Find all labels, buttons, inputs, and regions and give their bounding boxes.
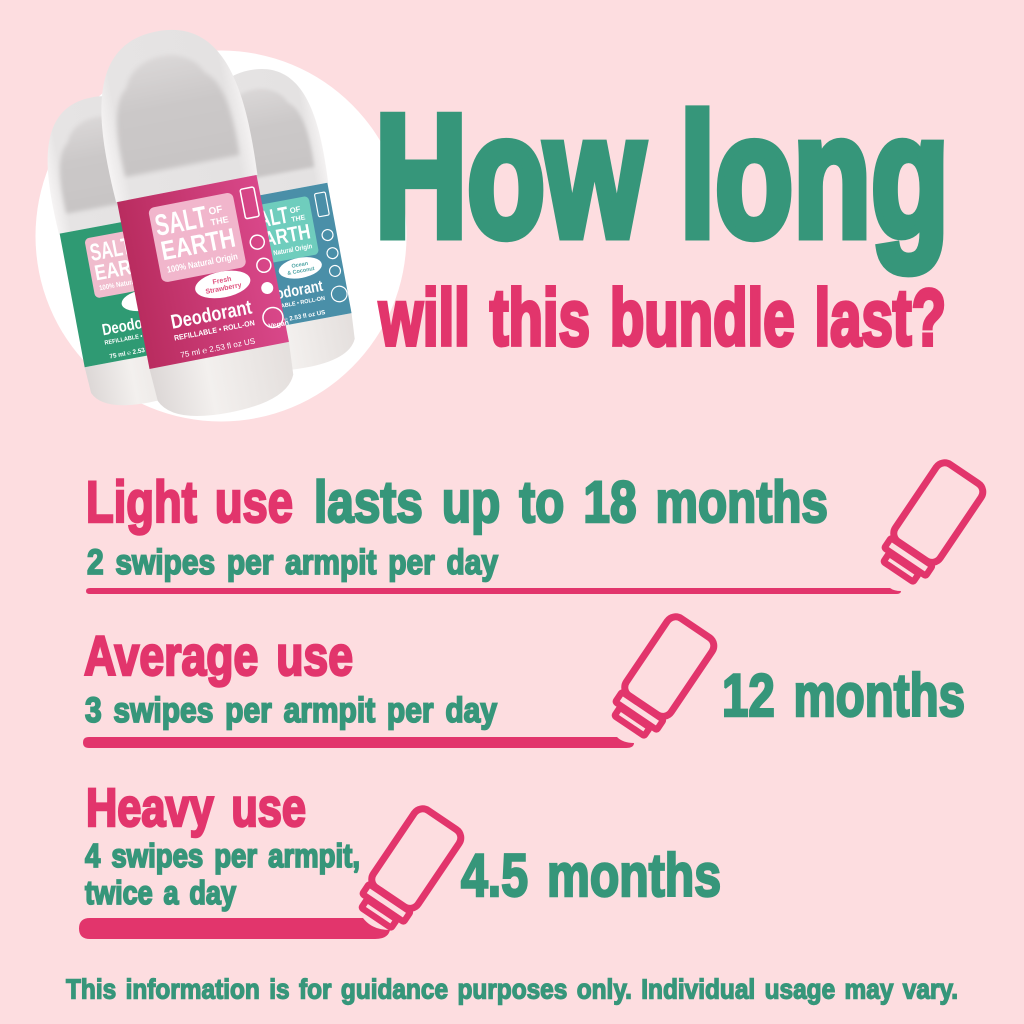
heavy use row: [79, 778, 721, 939]
flavour oval: Strawberry: [205, 282, 242, 296]
product: green deodorant bottle: 75 ml ℮ 2.53 fl oz US: [109, 342, 171, 360]
product: blue deodorant bottle: EARTH: [251, 220, 312, 254]
product: pink strawberry deodorant bottle: Vegan: [268, 320, 290, 330]
heavy use bar: [79, 918, 390, 939]
flavour oval: [193, 266, 253, 303]
product: green deodorant bottle: Deodorant: [101, 310, 169, 339]
average use detail: 3 swipes per armpit per day: [85, 691, 497, 730]
product: pink strawberry deodorant bottle: REFILLABLE • ROLL-ON: [173, 318, 255, 343]
product: green deodorant bottle: REFILLABLE • ROLL-ON: [104, 329, 170, 347]
product: blue deodorant bottle: OF: [289, 205, 301, 215]
product: pink strawberry deodorant bottle: THE: [210, 214, 229, 228]
light use bar: [86, 588, 901, 594]
average use bar: [83, 737, 634, 748]
product: green deodorant bottle: 100% Natural Origin: [98, 273, 157, 292]
light use duration: lasts up to 18 months: [314, 470, 828, 535]
product: blue deodorant bottle: Ocean: [291, 261, 309, 270]
product: blue deodorant bottle: [194, 60, 361, 378]
product: pink strawberry deodorant bottle: SALT: [152, 201, 210, 243]
product: pink strawberry deodorant bottle: 100% Natural Origin: [166, 251, 239, 275]
product: green deodorant bottle: SALT: [88, 233, 134, 267]
product: pink strawberry deodorant bottle: OF: [208, 204, 223, 218]
product: pink strawberry deodorant bottle: 75 ml ℮ 2.53 fl oz US: [180, 336, 256, 360]
heavy use label: Heavy use: [86, 778, 306, 838]
heavy use detail: twice a day: [85, 874, 237, 911]
average use label: Average use: [84, 624, 353, 687]
product: pink strawberry deodorant bottle: Deodorant: [169, 297, 254, 334]
product: blue deodorant bottle: THE: [291, 214, 306, 224]
product: pink strawberry deodorant bottle: [84, 17, 304, 426]
product: green deodorant bottle: [34, 87, 207, 413]
average use duration: 12 months: [722, 662, 965, 729]
product: blue deodorant bottle: SALT: [246, 202, 291, 235]
heavy use duration: 4.5 months: [461, 842, 721, 909]
light use detail: 2 swipes per armpit per day: [87, 543, 498, 582]
icon: bottle light: [876, 459, 987, 587]
product: blue deodorant bottle: REFILLABLE • ROLL-ON: [262, 296, 326, 313]
icon: bottle heavy: [354, 805, 465, 933]
average use row: [83, 613, 965, 748]
light use label: Light use: [86, 470, 293, 535]
heavy use detail: [85, 837, 360, 911]
product: blue deodorant bottle: Deodorant: [258, 278, 324, 306]
icon: bottle average: [607, 613, 718, 741]
product: blue deodorant bottle: 100% Natural Origin: [256, 243, 313, 260]
product: blue deodorant bottle: & Coconut: [287, 266, 315, 277]
product: green deodorant bottle: EARTH: [92, 250, 156, 285]
white circle behind products: [36, 50, 406, 422]
flavour oval: Fresh: [212, 276, 232, 286]
light use row: [86, 459, 987, 594]
product: blue deodorant bottle: 75 ml ℮ 2.53 fl oz US: [266, 309, 326, 327]
heavy use detail: 4 swipes per armpit,: [85, 837, 360, 874]
product: pink strawberry deodorant bottle: EARTH: [158, 223, 238, 266]
